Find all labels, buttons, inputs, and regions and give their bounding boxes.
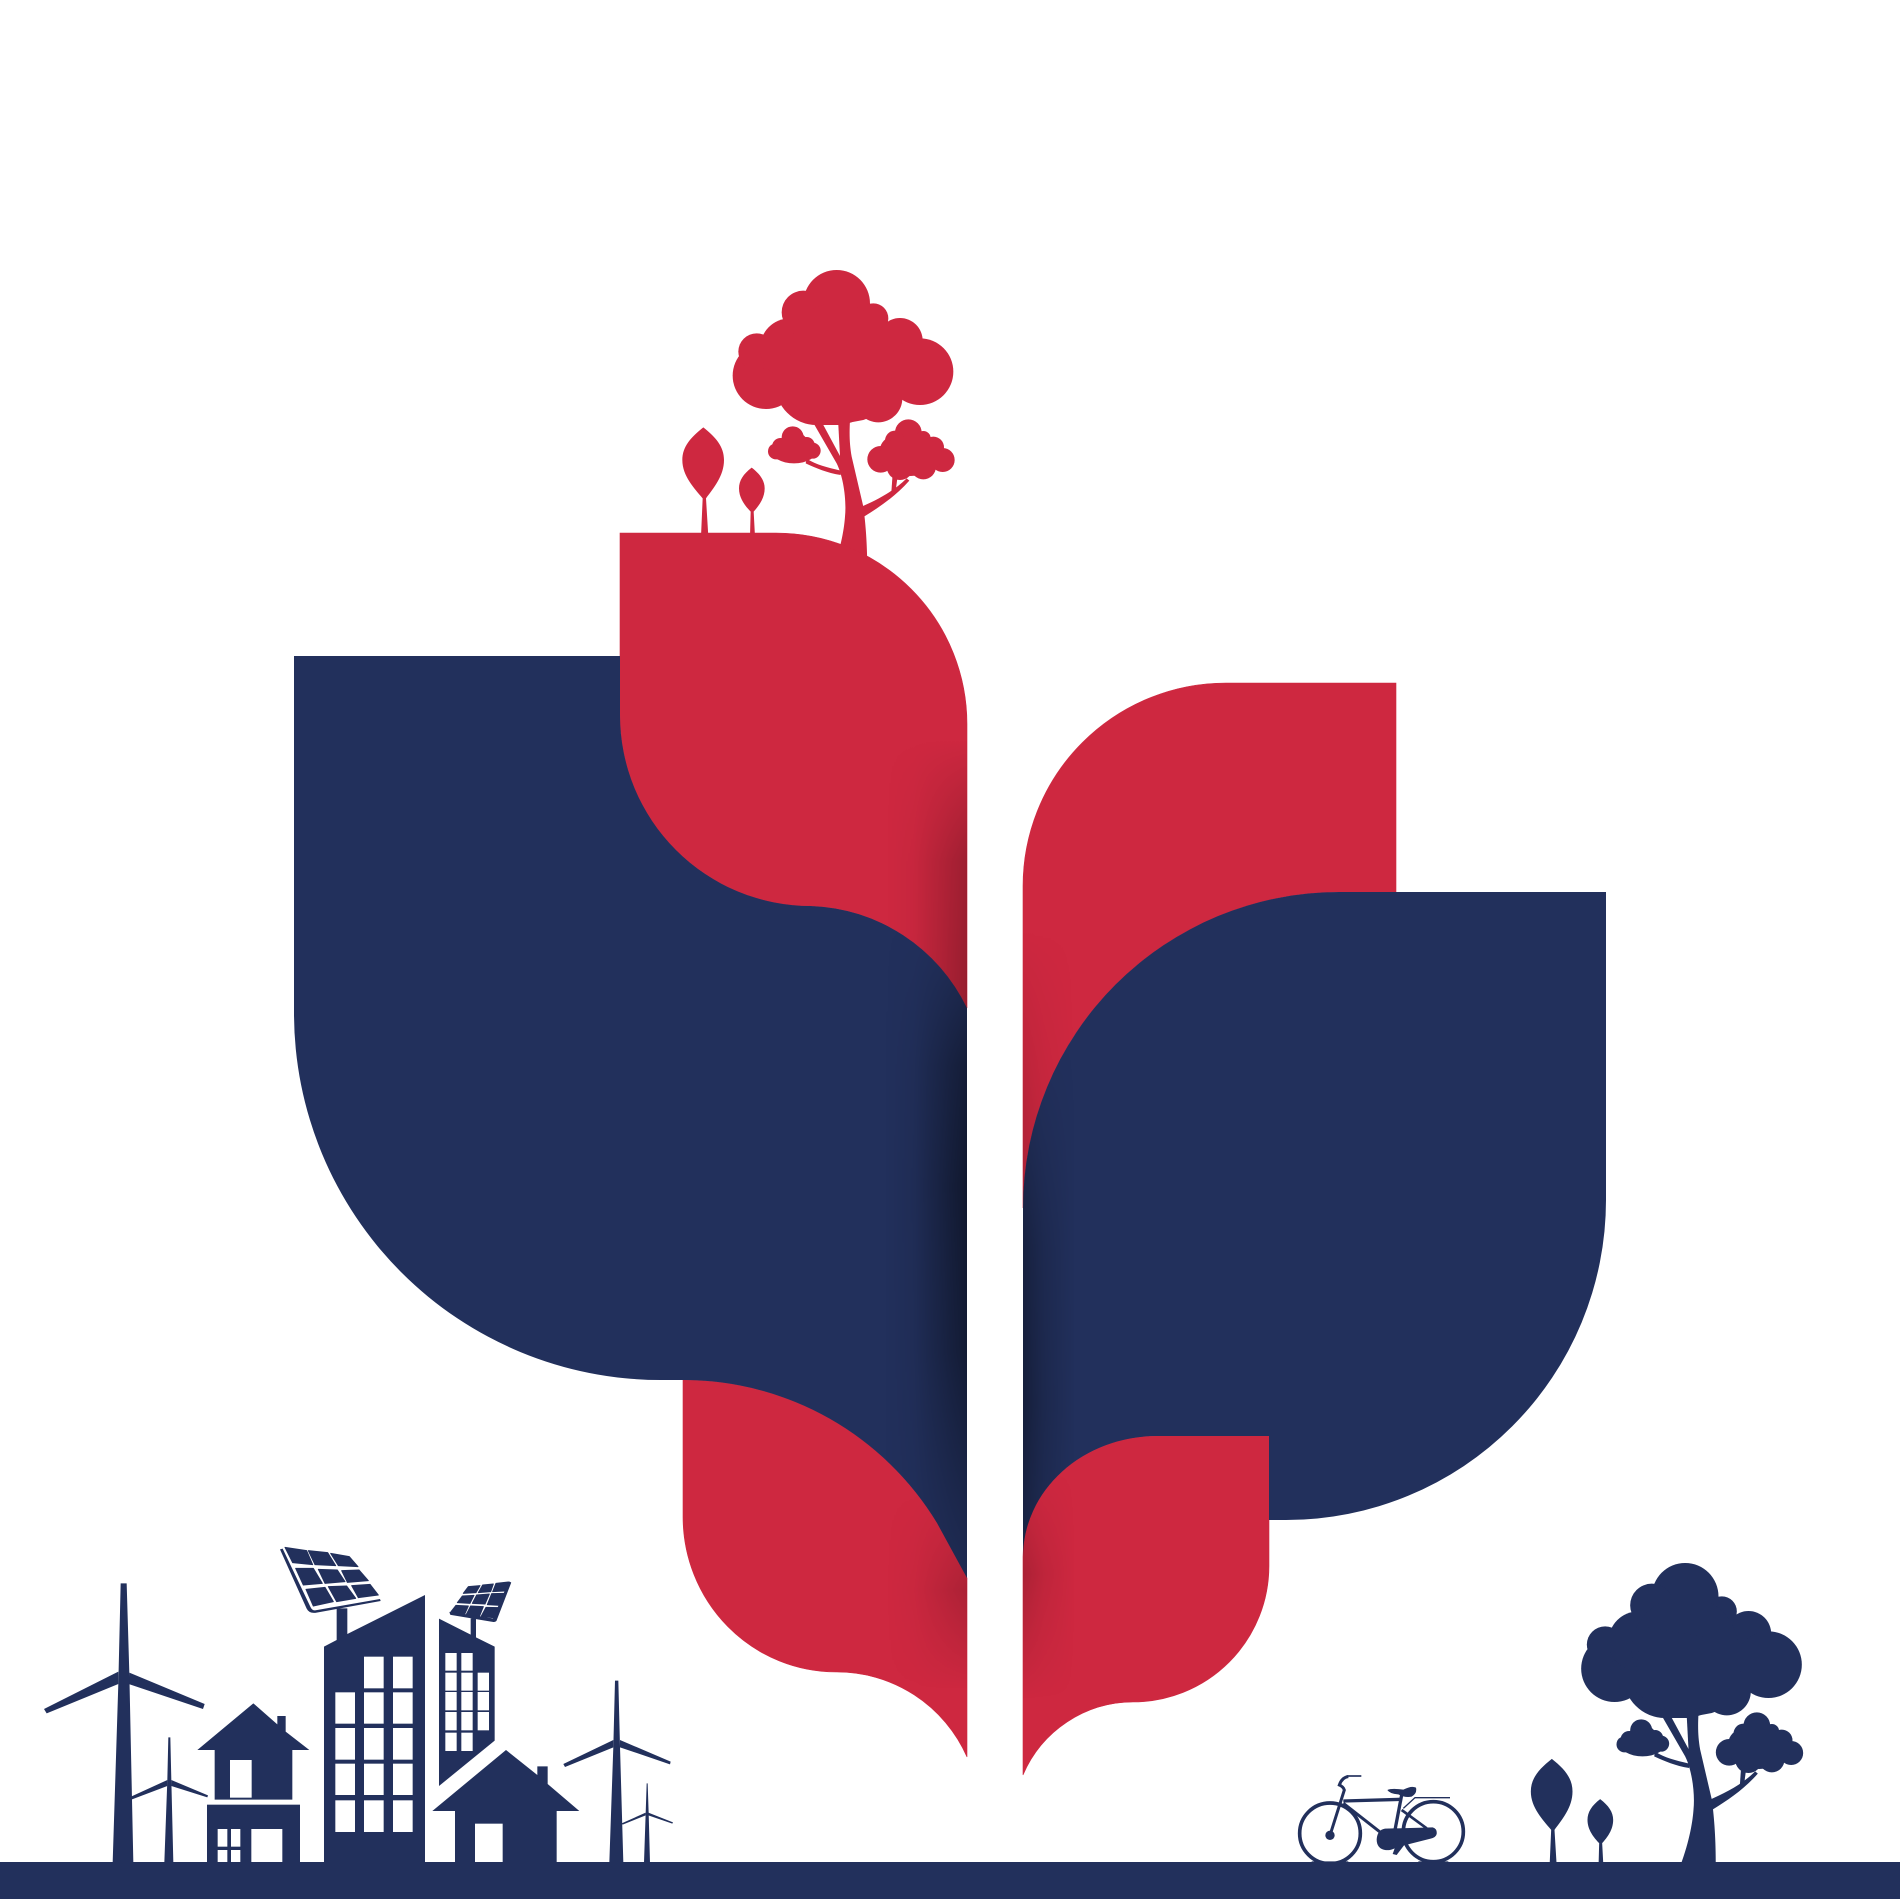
icon: bicycle [1300,1776,1463,1864]
icon: large wind turbine [44,1583,205,1863]
panel: lower-right red petal [1023,1436,1269,1775]
large navy tree [1581,1563,1803,1866]
icon: house lower floor [207,1805,300,1863]
panel: left navy petal [294,656,967,1578]
icon: right house [432,1750,579,1863]
icon: tall building [324,1595,425,1863]
panel: upper-right red petal [1023,683,1396,1208]
icon: medium wind turbine [563,1681,671,1863]
left cityscape part one: turbines, house, tower [44,1547,425,1863]
icon: large solar panel [280,1547,381,1613]
icon: house upper floor [197,1703,309,1800]
panel: lower-left red petal [683,1380,967,1757]
panel: right navy petal [1023,892,1606,1557]
icon: tiny wind turbine [622,1783,673,1863]
icon: slanted building [439,1618,495,1786]
navy saplings [1531,1759,1613,1868]
panel: upper-left red petal [620,533,967,1008]
large red tree [733,270,955,573]
navy tree and saplings on the right [1531,1563,1803,1868]
fold shadows along the central gap [880,740,1080,1700]
icon: small solar panel [450,1582,511,1622]
left cityscape part two: slanted building, house, turbines [432,1582,673,1863]
icon: small wind turbine [131,1737,208,1863]
ground strip [0,1862,1900,1899]
red saplings [682,427,765,537]
red tree and saplings on top [682,270,955,573]
